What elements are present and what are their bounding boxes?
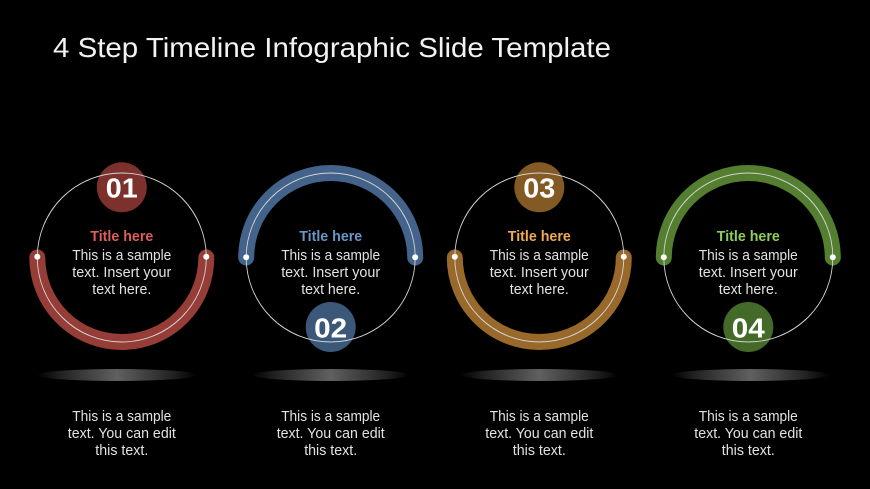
step 4 text (699, 248, 798, 298)
thick arc: blue (246, 173, 415, 258)
step 1 text: text here. (92, 282, 151, 298)
number 01: 01 (106, 172, 138, 204)
step 2 (243, 173, 418, 459)
number badge 03 circle (514, 162, 564, 212)
step 1 caption (68, 409, 176, 459)
end dots (243, 254, 418, 260)
number 03: 03 (523, 172, 555, 204)
end dots (34, 254, 209, 260)
step 2 text: This is a sample (281, 248, 380, 264)
title: 4 Step Timeline Infographic Slide Template (53, 32, 611, 63)
number 04: 04 (732, 312, 765, 344)
step 2 text: text here. (301, 282, 360, 298)
step 3 caption: This is a sample (490, 409, 589, 425)
step 2 text (281, 248, 380, 298)
end dots (661, 254, 836, 260)
end dots (452, 254, 627, 260)
step 4 text: text here. (719, 282, 778, 298)
step 2 text: text. Insert your (281, 265, 380, 281)
number 02: 02 (314, 312, 347, 344)
step 2 caption: text. You can edit (277, 426, 385, 442)
step 3 (452, 162, 627, 459)
step 1 caption: this text. (95, 443, 148, 459)
step 4 caption: text. You can edit (694, 426, 802, 442)
step 3 caption: text. You can edit (485, 426, 593, 442)
step 3 text: text. Insert your (490, 265, 589, 281)
step 4 caption: this text. (722, 443, 775, 459)
step 1 caption: text. You can edit (68, 426, 176, 442)
step 2 caption: this text. (304, 443, 357, 459)
step 3 text (490, 248, 589, 298)
step 1 (34, 162, 209, 459)
step 1 caption: This is a sample (72, 409, 171, 425)
step 4 caption: This is a sample (699, 409, 798, 425)
floor shadow (252, 369, 410, 381)
step 3 caption (485, 409, 593, 459)
step 1 text: text. Insert your (72, 265, 171, 281)
thin ring (455, 173, 624, 342)
floor shadow (460, 369, 618, 381)
step 3 caption: this text. (513, 443, 566, 459)
step 4 text: text. Insert your (699, 265, 798, 281)
thin ring (246, 173, 415, 342)
step 2 caption: This is a sample (281, 409, 380, 425)
step 1 text: This is a sample (72, 248, 171, 264)
step 2 caption (277, 409, 385, 459)
floor shadow (37, 369, 197, 381)
step 3 text: This is a sample (490, 248, 589, 264)
thick arc: green (664, 173, 833, 258)
step 2 title: Title here (299, 229, 362, 245)
number badge 01 circle (97, 162, 147, 212)
step 4 text: This is a sample (699, 248, 798, 264)
thick arc: orange (455, 258, 624, 342)
thin ring (664, 173, 833, 342)
step 3 title: Title here (508, 229, 571, 245)
step 1 title: Title here (90, 229, 153, 245)
step 4 (661, 173, 836, 459)
thick arc: red (37, 258, 206, 342)
step 4 caption (694, 409, 802, 459)
number badge 02 circle (306, 302, 356, 352)
floor shadow (672, 369, 830, 381)
step 1 text (72, 248, 171, 298)
thin ring (37, 173, 206, 342)
step 3 text: text here. (510, 282, 569, 298)
step 4 title: Title here (717, 229, 780, 245)
number badge 04 circle (723, 302, 773, 352)
